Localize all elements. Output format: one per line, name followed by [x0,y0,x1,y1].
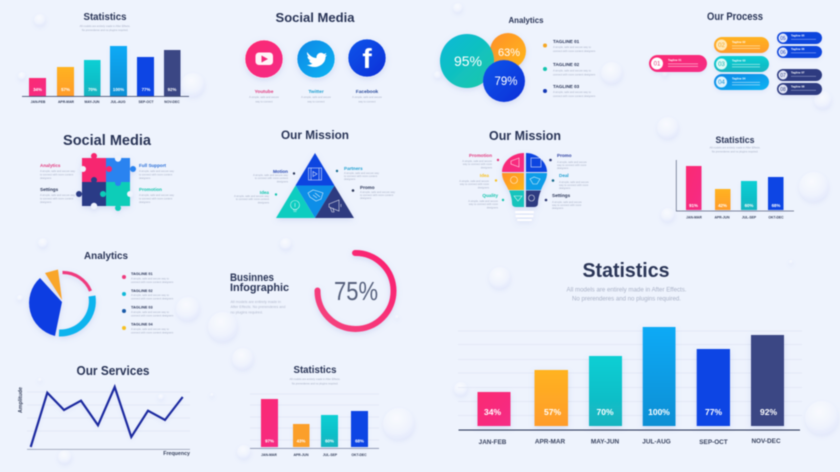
social descriptions: way to connect [307,100,325,104]
bar values [33,87,176,92]
social labels [255,89,379,95]
heading: Businnes [230,272,274,284]
month labels: JAN-FEB [479,439,507,446]
description: no plugins required. [230,310,263,314]
label: promo: to connect with more content [360,193,393,197]
bar values: 92% [168,87,176,92]
label: full support: A simple, safe and secure way [139,169,175,173]
description: No prerenderes and no plugins required. [292,382,339,386]
label: idea: Idea [480,173,489,178]
month labels [686,216,784,220]
step 07: Tagline 07 [791,70,805,74]
description: No prerenderes and no plugins required. [712,150,759,154]
step 04: Tagline 04 [732,76,746,80]
legend: connect with more content designers [553,94,596,98]
heading: Analytics [508,16,544,25]
description: All models are entirely made in After Effects. [290,377,341,381]
social descriptions: way to connect [358,100,376,104]
heading: Our Mission [489,128,561,143]
bar values: 77% [142,87,150,92]
heading: Statistics [84,12,127,23]
step 01 [649,55,707,72]
legend: connect with more content designers [131,296,174,300]
label: promo: designers [360,196,372,200]
description: No prerenderes and no plugins required. [572,296,681,302]
bar values: 68% [772,203,780,208]
light bulb [502,153,547,221]
icon: megaphone [329,200,341,212]
description [290,377,341,386]
social labels: Facebook [356,89,379,95]
label: idea: designers [478,186,490,190]
label: motion: Motion [273,169,288,174]
label: deal: designers [559,186,571,190]
month labels: JAN-MAR [261,453,277,457]
bar values: 60% [325,438,334,444]
legend: TAGLINE 01 [131,272,153,276]
heading: Social Media [63,133,152,149]
label: full support: to connect with more content [139,172,172,176]
label: idea [234,190,277,204]
bar chart [686,166,784,210]
step 08: 08 [780,87,786,93]
heading: Our Services [76,364,150,378]
label: promotion [462,153,499,170]
social descriptions: A simple, safe and secure [352,95,382,99]
legend: TAGLINE 02 [131,289,153,293]
month labels: APR-JUN [714,216,730,220]
bar chart [29,46,180,96]
month labels: NOV-DEC [164,100,180,104]
social descriptions [249,95,382,104]
label: motion: A simple, safe and secure way [253,173,289,177]
legend: A simple, safe and secure way to [131,310,169,314]
axis [458,430,800,431]
step 08 [777,83,822,95]
triangle [276,153,354,218]
description: All models are entirely made in [230,300,281,304]
bar values: 43% [297,438,305,444]
label: motion: to connect with more content [255,176,288,180]
step 01: Tagline 01 [668,58,682,62]
label: settings: designers [552,206,564,210]
label: partners: to connect with more content [344,174,377,178]
label: promotion: designers [481,166,493,170]
bar values: 100% [113,87,124,92]
bar chart [261,399,368,447]
label: promotion: to connect with more content [139,196,172,200]
social labels: Twitter [308,89,324,95]
description: All models are entirely made in After Effects. [710,146,761,150]
legend: connect with more content designers [131,280,174,284]
legend: A simple, safe and secure way to [553,90,591,94]
label: promotion: A simple, safe and secure way [139,193,175,197]
month labels: APR-MAR [535,438,565,446]
panel: statistics large [458,260,802,446]
label: quality: way to connect with more [469,202,499,206]
panel: our mission triangle [234,128,396,218]
bubble 95% [440,34,494,88]
month labels: APR-JUN [293,453,309,457]
bubble 63%: 63% [498,47,520,59]
label: idea [459,173,497,190]
month labels: JAN-FEB [31,100,46,104]
label: idea: A simple, safe and secure way [234,194,270,198]
bulb icons [510,158,541,201]
heading: Our Process [707,11,763,23]
bar values: 42% [718,203,727,208]
label: promo: Promo [360,185,375,190]
icon: youtube [245,40,283,78]
label: deal: A simple, safe and secure [559,180,589,184]
label: settings: designers [40,200,52,204]
legend: TAGLINE 03 [131,306,153,310]
grid lines [250,394,379,440]
legend: connect with more content designers [131,330,174,334]
step 07: 07 [780,73,786,79]
label: promotion: designers [139,200,151,204]
legend: connect with more content designers [553,49,596,53]
label: partners: Partners [344,166,363,171]
label: analytics: to connect with more content [40,172,73,176]
label: promo: Promo [557,153,572,158]
label: deal: Deal [559,173,569,178]
panel: our services line chart [18,364,190,457]
month labels [479,438,781,446]
label: idea: A simple, safe and secure [459,179,490,183]
label: motion: designers [277,180,289,184]
label: partners [336,166,380,181]
description [230,300,285,314]
month labels: SEP-OCT [138,100,154,104]
panel: statistics top left [22,12,189,104]
label: analytics: designers [40,176,52,180]
description: All models are entirely made in After Effects. [566,288,687,294]
label: promo: way to connect with more [557,163,587,167]
month labels [31,100,180,104]
legend: A simple, safe and secure way to [553,45,591,49]
panel: our mission bulb [459,128,589,221]
label: quality: designers [487,206,499,210]
panel: social media puzzle [40,133,175,211]
bar values: 91% [689,203,698,208]
month labels: JUL-AUG [642,438,671,446]
axes [676,160,794,211]
month labels [261,453,367,457]
label: quality: Quality [482,193,498,198]
step 06 [777,46,822,58]
label: settings: way to connect with more [552,203,582,207]
label: full support: Full Support [139,163,167,168]
step 03: Tagline 03 [732,58,746,62]
label: settings [545,193,582,210]
legend [543,39,596,98]
label: promotion: Promotion [139,187,162,192]
icon: handshake [308,190,323,201]
heading: Our Mission [281,128,349,142]
label: quality [468,193,504,210]
legend: connect with more content designers [553,72,596,76]
label: promotion [139,187,175,204]
label: promotion: A simple, safe and secure [462,159,493,163]
social labels: Youtube [255,89,274,95]
bar values: 97% [265,438,274,444]
social descriptions: way to connect [255,100,273,104]
axis [22,95,189,98]
month labels: MAY-JUN [85,100,100,104]
label: settings: to connect with more content [40,196,73,200]
icon: facebook: f [362,43,372,74]
label: analytics [40,163,76,180]
bar values: 70% [596,407,614,417]
legend: A simple, safe and secure way to [553,68,591,72]
month labels: OKT-DEC [768,216,784,220]
legend: connect with more content designers [131,314,174,318]
month labels: JUL-SEP [323,453,338,457]
step 02: 02 [718,43,725,49]
axis [27,448,190,451]
label: idea: Idea [260,190,269,195]
y axis label: Amplitude [18,387,24,413]
label: settings [40,187,76,204]
bar values: 34% [33,87,42,92]
month labels: JUL-AUG [110,100,126,104]
legend: A simple, safe and secure way to [131,293,169,297]
panel: analytics pie [29,251,174,336]
step 05: Tagline 05 [791,34,805,38]
legend: TAGLINE 04 [131,322,154,326]
label: promotion: Promotion [469,153,492,158]
bubble 79%: 79% [494,76,518,88]
grid lines [458,331,802,416]
month labels: JUL-SEP [742,216,757,220]
label: idea: to connect with more content [236,197,269,201]
label: deal [552,173,589,190]
bar values [484,407,777,417]
bar values: 57% [61,87,70,92]
label: settings: Settings [40,187,59,192]
social descriptions: A simple, safe and secure [249,95,279,99]
description [566,288,687,302]
icon: film [308,168,322,180]
panel: statistics lower middle [250,365,379,457]
heading: Social Media [276,10,355,25]
month labels: APR-MAR [58,100,75,104]
icon: facebook [348,39,386,77]
legend: TAGLINE 03 [553,84,580,89]
label: idea: way to connect with more [460,182,490,186]
grid lines [27,392,190,431]
step 04: 04 [718,80,725,86]
heading: Statistics [582,260,670,282]
label: deal: way to connect with more [559,183,589,187]
bar values [265,438,364,444]
bar values: 100% [648,407,670,417]
bar chart [478,327,784,426]
month labels: NOV-DEC [751,438,781,445]
label: promo [352,185,396,200]
label: promotion: way to connect with more [463,162,493,166]
bar values: 57% [544,407,561,417]
label: analytics: A simple, safe and secure way [40,169,76,173]
panel: analytics bubbles [440,16,596,102]
month labels: MAY-JUN [591,438,619,446]
bar values [689,203,780,208]
label: motion [253,169,295,184]
label: analytics: Analytics [40,163,61,168]
heading: Analytics [84,251,128,262]
heading: Statistics [716,135,754,145]
x axis label: Frequency [163,451,190,457]
panel: statistics right [676,135,794,220]
panel: our process [649,11,822,95]
step 08: Tagline 08 [791,84,805,88]
bar values: 68% [355,438,364,444]
step 05 [777,32,822,44]
bar values: 92% [760,407,777,417]
step 03 [714,56,769,72]
bar values: 70% [88,87,97,92]
legend: TAGLINE 02 [553,62,580,67]
description [710,146,761,154]
step 01: 01 [654,62,661,68]
month labels: OKT-DEC [351,453,367,457]
ring gauge [317,253,393,329]
label: full support [139,163,175,180]
heading [230,272,289,294]
month labels: JAN-MAR [686,216,702,220]
legend [122,272,174,334]
step 05: 05 [780,36,786,42]
value: 75% [334,276,378,306]
month labels: SEP-OCT [699,439,728,446]
label: settings: A simple, safe and secure way [40,193,76,197]
bubble 95%: 95% [454,53,482,69]
description: After Effects. No prerenderes and [230,305,285,309]
label: idea: designers [258,200,270,204]
legend: A simple, safe and secure way to [131,327,169,331]
step 02 [714,37,769,53]
icon: twitter [297,40,335,78]
bar values: 34% [484,407,501,417]
legend: TAGLINE 01 [553,39,580,44]
panel: social media icons [245,10,386,104]
label: promo: A simple, safe and secure way [360,190,396,194]
label: full support: designers [139,176,151,180]
label: partners: A simple, safe and secure way [344,171,380,175]
label: settings: Settings [552,193,571,198]
label: settings: A simple, safe and secure [552,200,582,204]
pie chart [29,270,92,336]
label: promo [549,153,587,170]
line chart [31,387,183,447]
icon: bulb [290,200,300,212]
bubble 79% [483,60,525,102]
step 02: Tagline 02 [732,40,746,44]
label: promo: A simple, safe and secure [557,160,587,164]
axis [250,447,379,450]
step 06: 06 [780,50,786,56]
description: No prerenderes and no plugins required. [82,28,129,32]
social descriptions: A simple, safe and secure [301,95,331,99]
label: quality: A simple, safe and secure [468,199,499,203]
bar values: 77% [705,407,722,417]
label: partners: designers [344,177,356,181]
heading: Statistics [294,365,337,376]
puzzle [76,153,136,211]
description: All models are entirely made in After Effects. [80,24,131,28]
label: promo: designers [557,166,569,170]
step 04 [714,74,769,90]
description [80,24,131,32]
heading: Infographic [230,282,289,294]
step 06: Tagline 06 [791,47,805,51]
panel: business infographic [230,253,393,329]
bubble 63% [490,33,526,69]
legend: A simple, safe and secure way to [131,276,169,280]
bar values: 60% [745,203,753,208]
step 03: 03 [718,62,725,68]
step 07 [777,69,822,81]
